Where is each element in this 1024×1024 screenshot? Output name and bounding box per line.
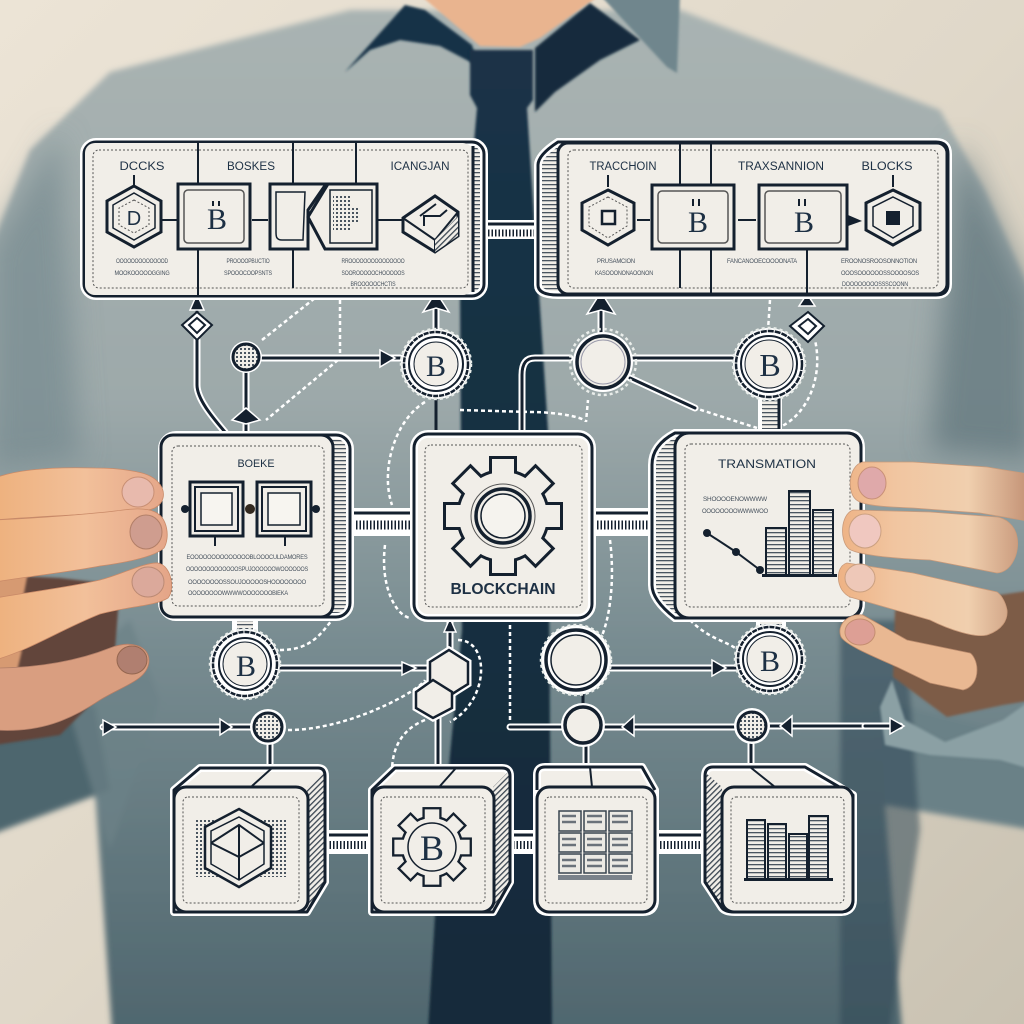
- bar chart: [744, 816, 833, 881]
- icon: plain small node: [561, 703, 605, 747]
- collar: [345, 0, 680, 112]
- left little finger: [0, 644, 149, 730]
- dotted links: [262, 298, 817, 772]
- text block: [342, 258, 405, 288]
- text block: SOOROOOOOCHOOOOOS: [342, 270, 405, 277]
- heading: TRACCHOIN: [590, 161, 656, 173]
- icon: hexagon: [582, 190, 634, 245]
- panel: lower nodes: [210, 624, 805, 747]
- icon: coin: B: [426, 350, 446, 383]
- icon: coin: [735, 624, 805, 694]
- icon: grid node: [250, 709, 286, 745]
- icon: bitcoin gear: [394, 809, 470, 885]
- icon: bitcoin square: B: [207, 203, 227, 236]
- right ring finger: [838, 563, 1007, 636]
- text block: OOOOOOOOOOOOOSPUJOOOOOOWOOOOOOS: [186, 566, 309, 573]
- text block: EOOOOOOOOOOOOOOBLOOOCULDAMORES: [186, 554, 308, 561]
- text block: OOOOOOOOSSOUJOOOOOSHOOOOOOOO: [188, 579, 306, 586]
- icon: diamond left: [182, 312, 212, 340]
- text block: [224, 258, 273, 277]
- connector mid left: [335, 508, 417, 536]
- panel: right transaction card: [652, 433, 861, 618]
- heading: BLOCKS: [862, 161, 913, 173]
- icon: grid node: [734, 708, 770, 744]
- right little finger: [840, 615, 977, 690]
- icon: bitcoin gear: B: [420, 828, 444, 868]
- icon: plain node: [541, 625, 611, 695]
- panel: bottom grid card: [537, 767, 655, 912]
- connector bottom 2: [492, 830, 540, 854]
- heading: BOSKES: [227, 161, 275, 173]
- icon: cube in hexagon: [195, 809, 288, 887]
- bar chart: [762, 491, 837, 577]
- text block: KASOOONONAOONON: [595, 270, 653, 277]
- panel: bottom gear card: [372, 768, 510, 912]
- heading: BOEKE: [238, 458, 274, 470]
- panel: bottom bar chart card: [705, 767, 853, 912]
- icon: coin: B: [759, 347, 781, 383]
- heading: TRAXSANNION: [738, 161, 824, 173]
- text block: OOOOOOOOOOOOOD: [116, 258, 168, 265]
- icon: hexagon D: D: [127, 208, 141, 230]
- connector bottom 3: [653, 830, 725, 854]
- arrow: right end over cuff: [865, 718, 904, 734]
- icon: table grid: [558, 811, 632, 880]
- tie: [428, 50, 552, 1024]
- icon: grid node: [230, 341, 262, 373]
- icon: split box: [270, 184, 377, 249]
- text block: [595, 258, 653, 277]
- left middle finger: [0, 509, 167, 582]
- connector top: [474, 220, 560, 239]
- heading: DCCKS: [120, 161, 165, 173]
- text block: OOOSOOOOOOSSOOOOSOS: [841, 270, 920, 277]
- text block: OOOOOOOOWWWWOO: [702, 508, 768, 515]
- text block: PROOOOPBUCTIO: [226, 258, 270, 265]
- connector bottom 1: [305, 830, 375, 854]
- solid link left top: [197, 340, 225, 432]
- text block: SHOOOOENOWWWW: [703, 496, 768, 503]
- right hand: [838, 462, 1024, 770]
- text block: [702, 496, 768, 515]
- text block: SPOOOCOOPSNTS: [224, 270, 273, 277]
- panel: top right flow: [538, 142, 948, 295]
- panel: bottom cube card: [174, 768, 325, 912]
- text block: [114, 258, 170, 277]
- text block: [841, 258, 920, 288]
- text block: BROOOOOCHCTIS: [350, 281, 396, 288]
- icon: coin: B: [236, 650, 256, 683]
- neck: [420, 0, 600, 47]
- icon: bitcoin square: [759, 185, 847, 249]
- text block: DOOOOOOOOSSSCOONN: [842, 281, 908, 288]
- vertical connectors: [232, 395, 786, 637]
- left palm joints: [0, 572, 28, 676]
- icon: coin: [401, 329, 471, 399]
- connecting lines: [103, 292, 870, 786]
- text block: PRUSAMCION: [597, 258, 635, 265]
- left index finger: [0, 468, 163, 520]
- right middle finger: [843, 510, 1018, 573]
- icon: hexagon pair: [416, 650, 468, 718]
- right index finger: [850, 462, 1024, 522]
- upper row arrows: [190, 292, 815, 432]
- icon: coin: [210, 629, 280, 699]
- icon: coin: [733, 328, 805, 400]
- icon: bitcoin square: [652, 185, 734, 249]
- heading: TRANSMATION: [718, 459, 816, 471]
- rope connectors: [232, 220, 786, 854]
- icon: hexagon: [866, 190, 920, 245]
- panel: left card: [161, 435, 350, 617]
- left hand: [0, 468, 172, 745]
- icon: bitcoin square: B: [688, 206, 708, 239]
- text block: MOOKOOOOOGGING: [114, 270, 170, 277]
- text block: [186, 554, 309, 597]
- text block: FANCANOOECOOOONATA: [727, 258, 798, 265]
- text block: OOOOOOOOWWWWOOOOOOOBIEKA: [188, 590, 289, 597]
- panel: top left flow: [84, 142, 484, 296]
- icon: diamond right: [790, 312, 824, 342]
- text block: EROONOSROOSONNOTION: [841, 258, 917, 265]
- icon: gear: [446, 459, 560, 573]
- heading: blockchain: BLOCKCHAIN: [450, 581, 556, 598]
- icon: bitcoin square: B: [794, 206, 814, 239]
- icon: coin: B: [760, 645, 780, 678]
- icon: plain node: [570, 329, 636, 395]
- text block: RROOOOOOOOOOOOOOO: [342, 258, 405, 265]
- lower row arrows: [103, 618, 870, 786]
- icon: bitcoin square: [178, 184, 250, 249]
- panel: left node bitcoin: [182, 312, 471, 399]
- right shirt cuff: [880, 680, 1024, 770]
- panel: upper right nodes: [570, 312, 824, 400]
- icon: hexagon D: [107, 186, 161, 247]
- left ring finger: [0, 563, 172, 660]
- line chart: [703, 529, 764, 574]
- icon: block pair: [181, 482, 320, 546]
- icon: cube: [403, 196, 458, 252]
- heading: ICANGJAN: [390, 161, 450, 173]
- panel: center blockchain card: [414, 434, 592, 618]
- connector mid right: [590, 508, 675, 536]
- shirt side shading: [0, 130, 1024, 470]
